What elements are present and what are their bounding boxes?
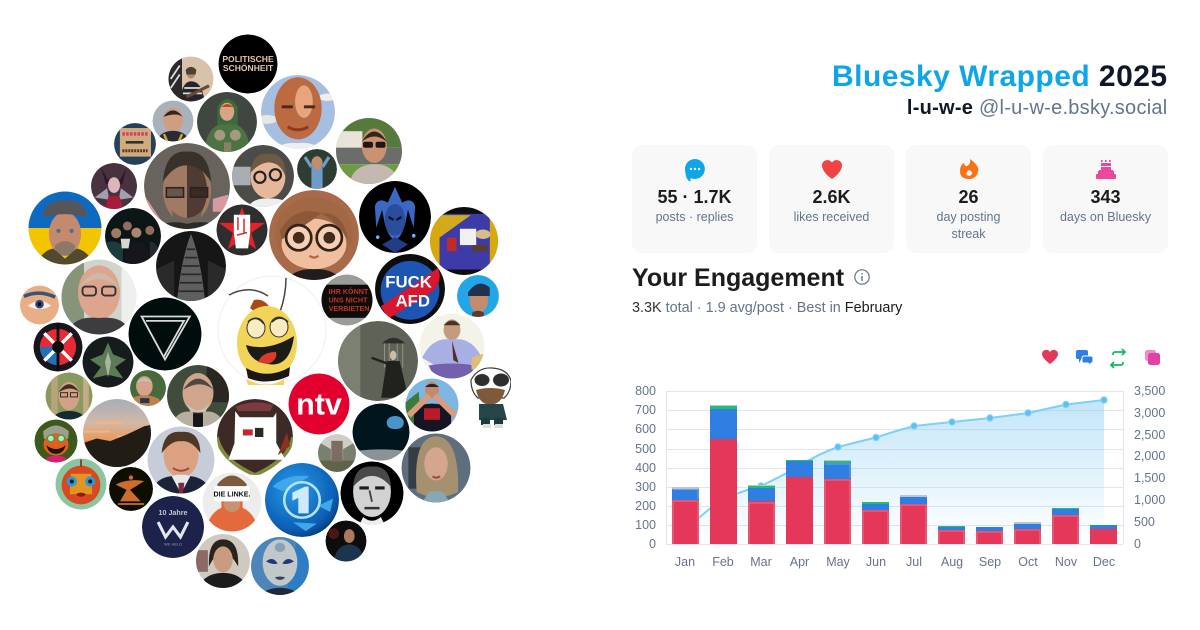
month labels: Mar [750, 555, 772, 569]
avatar: sunset [83, 399, 151, 467]
bar: Dec [1090, 525, 1117, 544]
left axis labels: 500 [635, 442, 656, 456]
avatar: sunglasses cartoon [471, 368, 511, 428]
avatar: main man with glasses [144, 143, 230, 229]
avatar: man with crossed arms [326, 520, 366, 562]
avatar: protest sign [114, 123, 156, 165]
bar: May [824, 460, 851, 544]
stat card: days on Bluesky [1043, 145, 1168, 253]
avatar: cartoon bee [218, 276, 326, 385]
bar: Nov [1052, 508, 1079, 544]
avatar: 10 Jahre badge [142, 496, 204, 558]
month labels: May [826, 555, 851, 569]
avatar: blonde woman [402, 434, 470, 502]
gridlines [666, 391, 1124, 544]
stat card: day posting streak [906, 145, 1031, 253]
cumulative line [685, 397, 1107, 531]
avatar: orange greek vase figure [109, 467, 153, 511]
avatar: Politische Schönheit: POLITISCHE [222, 54, 274, 64]
avatar: cartoon woman with glasses [269, 190, 359, 280]
avatar: Die Linke hoodie [202, 472, 262, 532]
title: Bluesky Wrapped 2025 [832, 60, 1168, 93]
avatar: dark tower [156, 231, 226, 301]
stat card: days on Bluesky: days on Bluesky [1060, 210, 1152, 224]
avatar: 10 Jahre badge: 10 Jahre [159, 509, 187, 517]
avatar: 10 Jahre badge: WE HELD [164, 542, 182, 547]
month labels: Dec [1093, 555, 1115, 569]
avatar: ntv logo [288, 374, 350, 434]
month labels: Aug [941, 555, 963, 569]
avatar: man in front of grey wall [152, 100, 194, 142]
legend: replies [1076, 350, 1093, 365]
avatar: Berlin wall segment [318, 434, 356, 472]
avatar: alien [251, 537, 309, 595]
right axis labels: 0 [1134, 537, 1141, 551]
right axis labels: 1,000 [1134, 493, 1165, 507]
engagement summary: 3.3K total · 1.9 avg/post · Best in February [632, 300, 903, 316]
icon: heart [822, 160, 842, 179]
bar: Oct [1014, 522, 1041, 544]
avatar: triangle logo [128, 298, 202, 370]
left axis labels: 100 [635, 518, 656, 532]
stat card: posts and replies: posts · replies [656, 210, 733, 224]
avatar: Politische Schönheit [218, 34, 278, 94]
avatar: black banner: UNS NICHT [329, 297, 368, 305]
stat card: day posting streak: 26 [958, 187, 979, 207]
avatar: Politische Schönheit: SCHÖNHEIT [223, 63, 274, 73]
icon: info [855, 270, 869, 284]
avatar: woman with umbrella [338, 321, 418, 401]
avatar: grey-bearded man in blazer [167, 365, 229, 427]
stat card: likes received: likes received [794, 210, 869, 224]
month labels: Nov [1055, 555, 1078, 569]
user handle: l-u-w-e @l-u-w-e.bsky.social [907, 97, 1168, 119]
left axis labels: 700 [635, 403, 656, 417]
bar: Mar [748, 485, 775, 544]
avatar: black banner [322, 274, 372, 326]
avatar: red X logo [34, 322, 82, 372]
avatar: tagesschau globe [265, 463, 339, 537]
left axis labels: 800 [635, 384, 656, 398]
month labels: Jan [675, 555, 695, 569]
month labels: Jul [906, 555, 922, 569]
avatar: devil queen [91, 163, 137, 209]
chart legend [1042, 349, 1160, 368]
icon: cake [1096, 160, 1116, 179]
right axis labels: 3,000 [1134, 406, 1165, 420]
avatar: man in red T-shirt [406, 378, 458, 432]
right axis labels [1134, 384, 1165, 551]
stat card: posts and replies [632, 145, 757, 253]
avatar: woman with glasses [232, 145, 294, 207]
cumulative area [685, 400, 1104, 544]
avatar: green armored woman [197, 92, 257, 153]
avatar: black banner: VERBIETEN [329, 305, 369, 313]
avatar: bald man [257, 75, 336, 149]
avatar: man in shirt on sofa [420, 314, 484, 378]
avatar cluster [20, 34, 511, 595]
avatar: man in cap [457, 275, 499, 317]
stat card: likes received: 2.6K [812, 187, 851, 207]
avatar: FCK AFD button: FUCK [385, 273, 432, 292]
stat card: day posting streak: streak [951, 227, 986, 241]
avatar: man in sunglasses [336, 118, 402, 184]
left axis labels: 600 [635, 422, 656, 436]
avatar: cheering man [297, 149, 337, 189]
avatar: black and white portrait [340, 462, 404, 524]
legend: quotes [1145, 350, 1160, 365]
bar: Jul [900, 495, 927, 544]
bar: Jun [862, 502, 889, 544]
avatar: Die Linke hoodie: DIE LINKE. [214, 491, 251, 499]
icon: speech bubble [685, 159, 705, 182]
avatar: eye close-up [20, 286, 59, 324]
stat card: likes received [769, 145, 894, 253]
left axis labels: 400 [635, 461, 656, 475]
avatar: Ritter Sport bar [430, 207, 498, 275]
chart: monthly engagement [635, 384, 1165, 569]
left axis labels: 200 [635, 499, 656, 513]
month labels: Jun [866, 555, 886, 569]
right axis labels: 3,500 [1134, 384, 1165, 398]
avatar: FCK AFD button [375, 254, 445, 324]
right axis labels: 2,000 [1134, 449, 1165, 463]
stat card: days on Bluesky: 343 [1090, 187, 1121, 207]
avatar: band photo [105, 208, 161, 264]
bar: Jan [672, 487, 699, 544]
stacked bars [672, 405, 1117, 544]
right axis labels: 2,500 [1134, 428, 1165, 442]
avatar: blue jester [359, 181, 431, 253]
left axis labels: 300 [635, 480, 656, 494]
avatar: ntv logo: ntv [296, 387, 342, 421]
avatar: earthrise [352, 404, 410, 460]
stat card: posts and replies: 55 · 1.7K [657, 187, 732, 207]
avatar: small man, orange shirt [130, 370, 166, 406]
avatar: woman in black [196, 534, 250, 588]
left axis labels: 0 [649, 537, 656, 551]
avatar: apple character [56, 458, 106, 510]
month labels: Feb [712, 555, 734, 569]
bar: Apr [786, 460, 813, 544]
avatar: black banner: IHR KÖNNT [329, 287, 369, 296]
bar: Sep [976, 527, 1003, 544]
month labels: Sep [979, 555, 1001, 569]
month labels [675, 555, 1115, 569]
right axis labels: 1,500 [1134, 471, 1165, 485]
month labels: Oct [1018, 555, 1038, 569]
icon: flame [960, 159, 978, 179]
heading: Your Engagement: Your Engagement [632, 264, 845, 292]
stat card: day posting streak: day posting [937, 210, 1001, 224]
avatar: man in suit [148, 426, 214, 494]
legend: likes [1042, 350, 1058, 364]
avatar: red fist [216, 204, 268, 256]
avatar: red muppet [34, 420, 78, 462]
legend: reposts [1111, 349, 1125, 368]
avatar: crest [217, 399, 293, 475]
bar: Aug [938, 526, 965, 544]
avatar: man with glasses in forest [46, 372, 92, 420]
avatar: Ukraine flag man [28, 192, 102, 264]
month labels: Apr [790, 555, 809, 569]
right axis labels: 500 [1134, 515, 1155, 529]
left axis labels [635, 384, 656, 551]
avatar: FCK AFD button: AFD [396, 292, 430, 311]
bar: Feb [710, 405, 737, 544]
avatar: older man with glasses [62, 260, 136, 334]
avatar: guitarist [168, 56, 214, 102]
avatar: cannabis plant [82, 336, 134, 388]
